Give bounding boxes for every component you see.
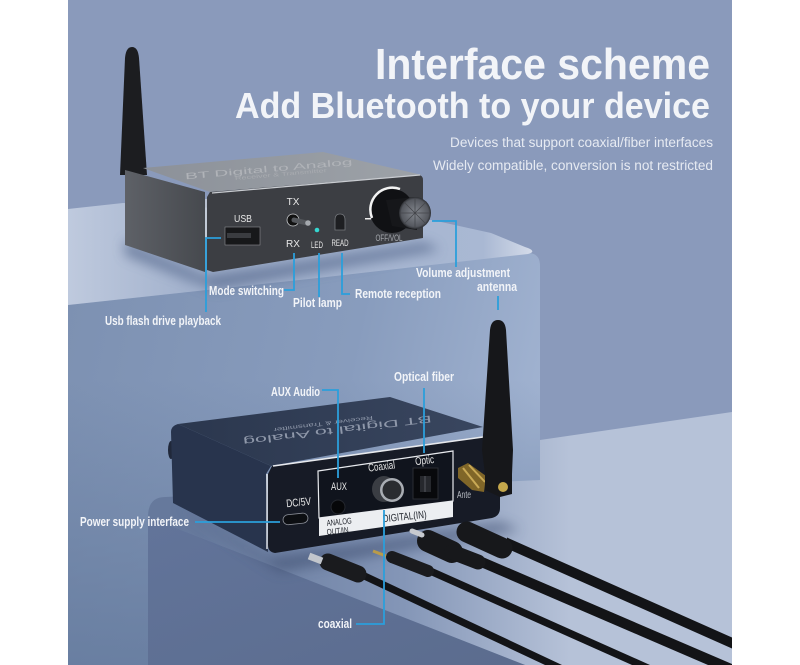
top face bbox=[178, 397, 483, 466]
TX label: TX bbox=[287, 197, 300, 208]
white band bbox=[319, 501, 453, 536]
lower platform front bbox=[148, 517, 525, 665]
AUX label: AUX bbox=[331, 481, 347, 493]
USB port bbox=[225, 227, 260, 245]
Coaxial label: Coaxial bbox=[368, 459, 396, 475]
USB-C port bbox=[283, 513, 308, 525]
Optic label: Optic bbox=[414, 454, 435, 468]
upper device bbox=[120, 47, 440, 290]
device shadow bbox=[125, 240, 440, 290]
side knob bump bbox=[168, 441, 172, 459]
pedestal front face bbox=[68, 253, 540, 493]
printed top subtext: Receiver & Transmitter bbox=[235, 168, 327, 182]
optic port bbox=[413, 468, 438, 499]
DC/5V label: DC/5V bbox=[286, 496, 312, 510]
label: mode switching: Mode switching bbox=[209, 284, 284, 298]
coaxial jack bbox=[372, 476, 404, 502]
3.5mm cable bbox=[373, 551, 650, 665]
LED dot bbox=[315, 228, 319, 232]
RCA cable bbox=[412, 531, 732, 665]
lower pedestal bbox=[148, 480, 540, 665]
gold connector bbox=[458, 463, 486, 492]
label: AUX audio: AUX Audio bbox=[271, 385, 320, 399]
label: pilot lamp: Pilot lamp bbox=[293, 296, 342, 310]
READ label: READ bbox=[332, 238, 349, 248]
left face bbox=[125, 170, 205, 272]
description line 2: Widely compatible, conversion is not restricted bbox=[433, 158, 713, 173]
left edge highlight bbox=[205, 199, 207, 238]
top face bbox=[143, 152, 422, 192]
lower right platform surface bbox=[540, 412, 732, 480]
background wall bbox=[68, 0, 732, 440]
LED label: LED bbox=[311, 240, 323, 250]
printed top text: BT Digital to Analog bbox=[242, 412, 432, 447]
subtitle: Add Bluetooth to your device bbox=[235, 85, 710, 126]
label: power supply: Power supply interface bbox=[80, 515, 189, 529]
left face bbox=[171, 424, 271, 552]
callout lines bbox=[195, 221, 498, 624]
toslink cable bbox=[467, 532, 732, 648]
left edge highlight bbox=[266, 474, 268, 549]
label: volume adjustment: Volume adjustment bbox=[416, 266, 511, 280]
ANALOG label: ANALOG bbox=[326, 515, 352, 528]
USB-C cable bbox=[309, 556, 562, 665]
antenna: upper bbox=[120, 47, 147, 175]
lower platform top bbox=[148, 480, 540, 665]
label: antenna: antenna bbox=[477, 280, 518, 294]
remote window bbox=[335, 214, 345, 230]
AUX jack bbox=[331, 500, 345, 514]
device shadow bbox=[241, 517, 518, 574]
printed top text: BT Digital to Analog bbox=[185, 157, 353, 181]
Antenna label: Ante bbox=[457, 489, 471, 501]
antenna: lower bbox=[482, 320, 513, 497]
printed top subtext: Receiver & Transmitter bbox=[273, 414, 373, 432]
USB label: USB bbox=[234, 214, 252, 225]
label: USB playback: Usb flash drive playback bbox=[105, 314, 221, 328]
label: optical fiber: Optical fiber bbox=[394, 370, 454, 384]
volume knob bbox=[365, 188, 431, 233]
title: Interface scheme bbox=[375, 40, 710, 89]
cables bbox=[309, 531, 732, 665]
pedestal front shading bbox=[68, 427, 540, 665]
RX label: RX bbox=[286, 239, 300, 250]
front face bbox=[207, 175, 423, 272]
pedestal top surface bbox=[68, 203, 532, 305]
OUT/IN label: OUT/IN bbox=[326, 525, 349, 537]
lower device bbox=[168, 320, 520, 572]
upper pedestal bbox=[68, 203, 540, 665]
label: remote reception: Remote reception bbox=[355, 287, 441, 301]
input panel bbox=[318, 451, 453, 537]
OFF/VOL label: OFF/VOL bbox=[376, 233, 402, 243]
description line 1: Devices that support coaxial/fiber interfaces bbox=[450, 135, 713, 150]
front top highlight bbox=[273, 437, 483, 466]
DIGITAL label: DIGITAL(IN) bbox=[382, 509, 427, 525]
front face bbox=[268, 434, 500, 553]
mode switch bbox=[287, 214, 311, 226]
front top highlight bbox=[212, 175, 420, 193]
label: coaxial: coaxial bbox=[318, 617, 352, 631]
